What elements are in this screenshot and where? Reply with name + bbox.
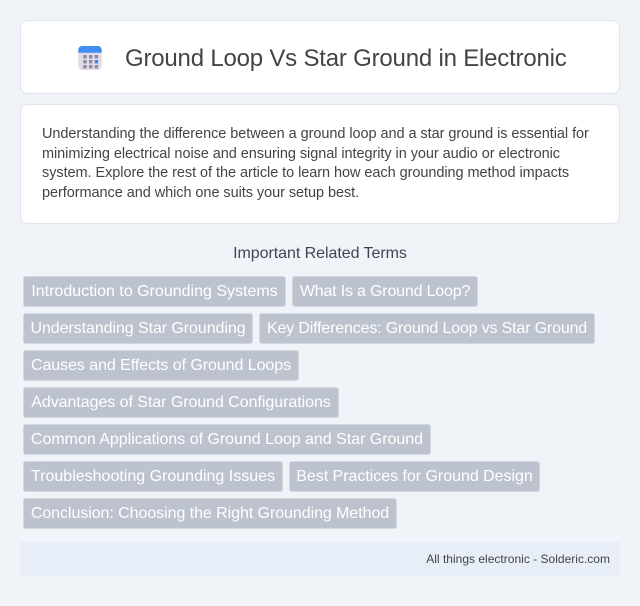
tag <box>23 387 339 418</box>
tag: Troubleshooting Grounding Issues <box>31 468 275 485</box>
heading: important related terms: Important Related Terms <box>233 245 407 262</box>
tag <box>259 313 595 344</box>
tag: Common Applications of Ground Loop and Star Ground <box>31 431 423 448</box>
footer text: All things electronic - Solderic.com <box>426 552 610 566</box>
tag: What Is a Ground Loop? <box>300 283 470 300</box>
tag <box>23 350 299 381</box>
panel: header <box>20 20 620 94</box>
intro text: system. Explore the rest of the article to learn how each grounding method impacts <box>42 165 569 181</box>
tag: Causes and Effects of Ground Loops <box>31 357 291 374</box>
tag <box>23 424 431 455</box>
tag <box>23 498 397 529</box>
icon: calendar <box>78 46 102 70</box>
tag list <box>23 276 595 529</box>
tag <box>289 461 540 492</box>
tag <box>23 461 283 492</box>
tag: Introduction to Grounding Systems <box>31 283 278 300</box>
tag: Key Differences: Ground Loop vs Star Ground <box>267 320 587 337</box>
intro text <box>42 126 589 200</box>
tag <box>292 276 478 307</box>
panel: introduction <box>20 104 620 224</box>
tag: Best Practices for Ground Design <box>296 468 533 485</box>
tag <box>23 313 253 344</box>
title: Ground Loop Vs Star Ground in Electronic <box>125 45 567 72</box>
tag: Advantages of Star Ground Configurations <box>31 394 331 411</box>
intro text: minimizing electrical noise and ensuring signal integrity in your audio or electronic <box>42 146 560 162</box>
tag <box>23 276 286 307</box>
intro text: performance and which one suits your setup best. <box>42 184 359 200</box>
tag: Conclusion: Choosing the Right Grounding Method <box>31 505 389 522</box>
intro text: Understanding the difference between a ground loop and a star ground is essential for <box>42 126 589 142</box>
tag: Understanding Star Grounding <box>30 320 246 337</box>
footer <box>20 542 620 576</box>
